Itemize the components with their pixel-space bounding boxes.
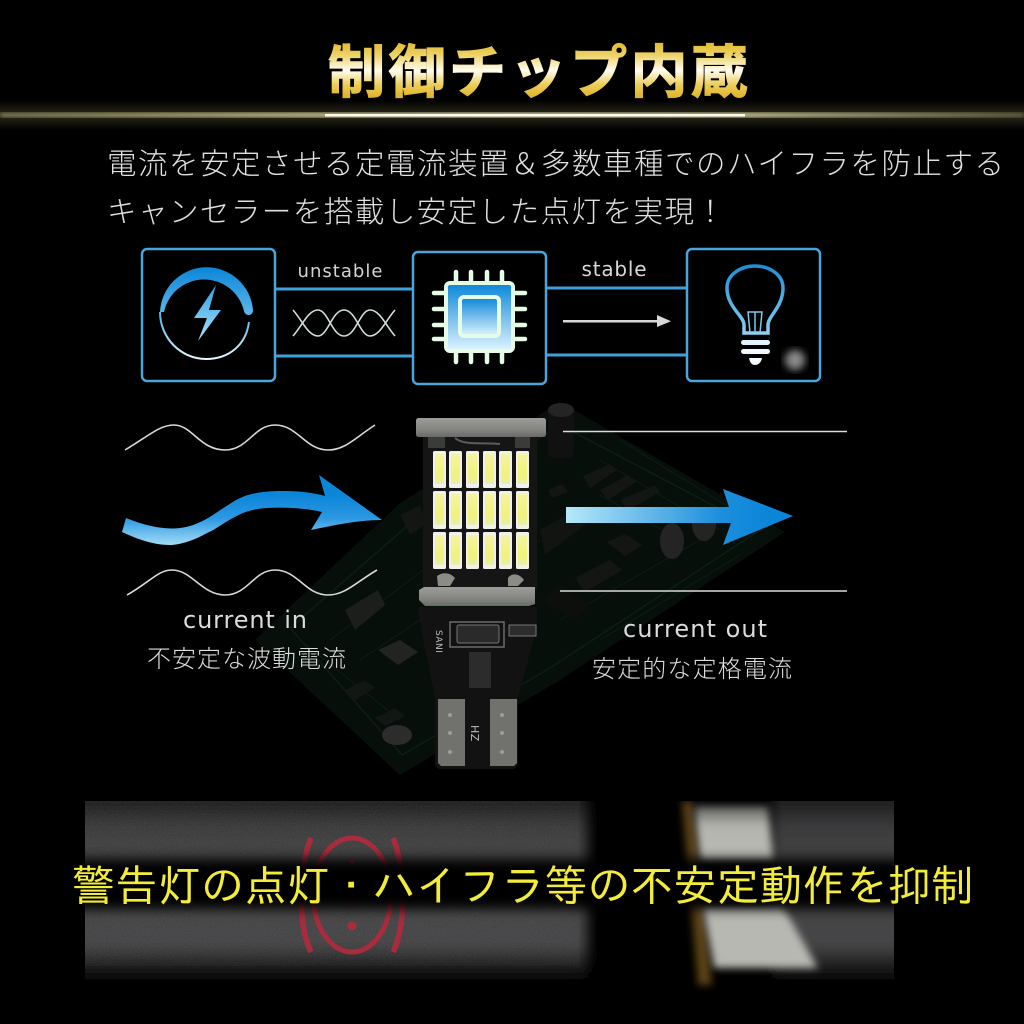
- silk text: HZ: [468, 725, 481, 742]
- LED chip grid: [433, 451, 529, 569]
- top metal cap: [416, 418, 546, 437]
- lower stem: [418, 607, 537, 769]
- panel: road marking photo: [678, 801, 894, 990]
- icon: lightning bolt: [194, 285, 221, 341]
- capacitor: [548, 403, 574, 458]
- label: current in: [147, 606, 346, 673]
- connector lines: [275, 288, 686, 356]
- transistor: [469, 652, 491, 688]
- dark text band: [610, 859, 930, 909]
- intro text: キャンセラーを搭載し安定した点灯を実現！: [107, 196, 725, 229]
- label: unstable: unstable: [298, 261, 382, 282]
- box: control chip: [413, 252, 546, 384]
- right lines: stable current: [560, 432, 847, 591]
- silk text: SANI: [433, 630, 443, 653]
- label: current out: current out: [623, 615, 767, 643]
- label: current out: [592, 615, 792, 683]
- label: stable: stable: [582, 257, 646, 281]
- contact holes: [448, 713, 504, 754]
- label: current in: current in: [183, 606, 307, 634]
- intro text: 電流を安定させる定電流装置＆多数車種でのハイフラを防止する: [107, 148, 1004, 181]
- box: light bulb: [687, 249, 820, 381]
- light bulb product: [416, 418, 546, 769]
- arrow: wavy current in: [122, 475, 382, 545]
- title heading: 制御チップ内蔵: [328, 41, 748, 105]
- upper circuit board: [423, 432, 537, 590]
- lower metal band: [419, 587, 535, 606]
- resistor: [450, 622, 536, 647]
- left waves: unstable current: [125, 425, 377, 595]
- arrow: stable current: [563, 315, 671, 327]
- label: current in: 不安定な波動電流: [147, 646, 346, 673]
- arrow: straight current out: [566, 489, 793, 545]
- icon: power gauge ring: [160, 267, 253, 359]
- label: current out: 安定的な定格電流: [592, 656, 792, 683]
- gold divider line with glow: [0, 100, 1024, 130]
- board components: [345, 464, 716, 745]
- icon: bulb: [727, 266, 783, 365]
- icon: chip: [434, 272, 525, 362]
- blurred spot: [785, 350, 805, 370]
- dark text band: [40, 859, 640, 909]
- flow diagram: [142, 249, 820, 384]
- box: power source: [142, 249, 275, 381]
- solder pads: [437, 573, 524, 586]
- icon: crossing waves: [293, 310, 395, 336]
- panel: warning lamp photo: [85, 801, 595, 980]
- bottom yellow caption: 警告灯の点灯・ハイフラ等の不安定動作を抑制: [72, 863, 974, 911]
- LED yellow phosphor: [435, 454, 527, 565]
- contacts: [438, 699, 517, 766]
- background circuit board: [255, 402, 785, 775]
- intro text: [107, 148, 1004, 229]
- icon: warning lamp: [301, 838, 403, 952]
- silk text: [433, 630, 481, 742]
